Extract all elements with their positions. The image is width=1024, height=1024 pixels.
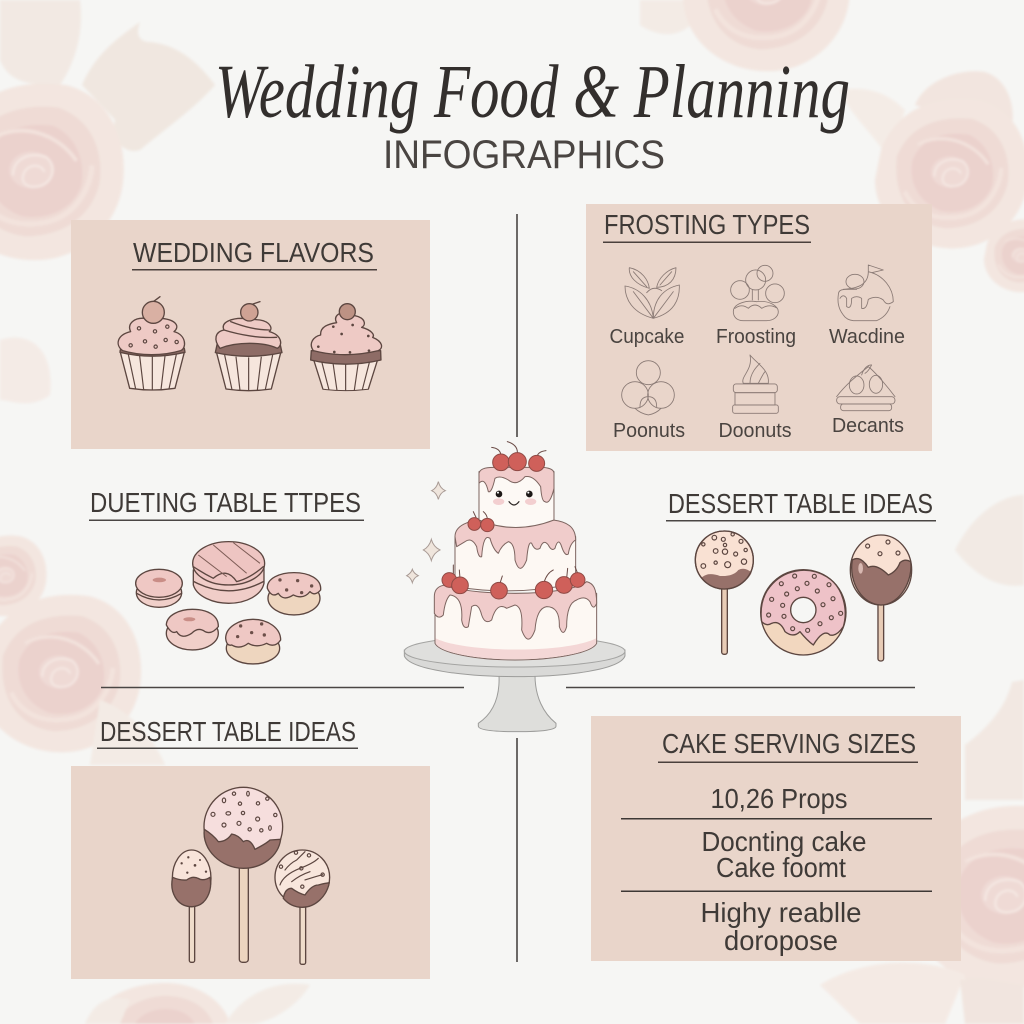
- icons: three cupcakes: [118, 297, 382, 391]
- heading: cake serving sizes: CAKE SERVING SIZES: [662, 728, 916, 759]
- text: serving row three: doropose: [724, 925, 838, 956]
- cherries: [442, 442, 585, 599]
- text: serving row two: Docnting cake: [702, 826, 866, 857]
- icon: three balls: [622, 361, 674, 415]
- icon: donut right: [267, 573, 321, 615]
- icon: cupcake two: [215, 302, 282, 391]
- panel: wedding flavors: [71, 220, 430, 449]
- heading: dessert table ideas right: DESSERT TABLE IDEAS: [668, 488, 933, 519]
- text: serving row three: Highy reablle: [700, 897, 862, 928]
- icon: donut front right: [226, 619, 281, 664]
- illustration: three-tier wedding cake on stand: [404, 442, 625, 732]
- title: [215, 50, 850, 177]
- labels: frosting types: Decants: [832, 415, 904, 437]
- labels: frosting types: Froosting: [716, 326, 796, 348]
- icon: swirled cake pop: [275, 850, 330, 964]
- sparkles: [407, 482, 445, 583]
- icon: small cake pop: [172, 850, 211, 962]
- labels: frosting types: Poonuts: [613, 420, 685, 442]
- icon: donut front left: [166, 609, 218, 650]
- text: serving row two: [702, 826, 866, 883]
- icons: three cake pops: [172, 787, 330, 964]
- title: INFOGRAPHICS: [383, 133, 665, 177]
- icons: frosting types: [622, 265, 895, 415]
- icon: cake with flag: [838, 265, 893, 321]
- middle tier: [455, 520, 576, 591]
- icons: macarons and donuts: [136, 542, 321, 664]
- icon: leaves: [625, 268, 679, 318]
- heading: dueting table types: DUETING TABLE TTPES: [90, 487, 361, 518]
- panel: cake serving sizes: [591, 716, 961, 961]
- labels: frosting types: Wacdine: [829, 326, 905, 348]
- labels: frosting types: [610, 326, 905, 442]
- heading: dessert table ideas left: DESSERT TABLE IDEAS: [100, 716, 356, 747]
- title: Wedding Food & Planning: [215, 50, 850, 134]
- top tier with face: [479, 467, 554, 527]
- icon: layered cake: [733, 355, 778, 413]
- icon: frosting balls: [731, 265, 784, 321]
- icon: large cake pop: [204, 787, 283, 962]
- icon: pastry slice: [837, 365, 895, 411]
- center divider lines: [101, 214, 915, 962]
- panel: cake pops: [71, 766, 430, 979]
- icon: cupcake three: [311, 304, 382, 391]
- icon: sprinkled donut: [761, 570, 846, 655]
- heading: wedding flavors: WEDDING FLAVORS: [133, 237, 374, 268]
- section: dessert table ideas right: [666, 488, 936, 661]
- icons: cake pops and donut: [695, 531, 912, 661]
- icon: cake pop right: [850, 535, 912, 661]
- text: serving row three: [700, 897, 862, 956]
- section: dueting table types: [89, 487, 364, 664]
- labels: frosting types: Cupcake: [610, 326, 684, 348]
- icon: cake pop left: [695, 531, 753, 654]
- icon: cupcake one: [118, 297, 185, 390]
- cake stand: [404, 636, 625, 732]
- heading: frosting types: FROSTING TYPES: [604, 209, 810, 240]
- labels: frosting types: Doonuts: [718, 420, 792, 442]
- text: serving row two: Cake foomt: [716, 852, 846, 883]
- icon: donut left: [136, 569, 182, 607]
- bottom tier: [434, 582, 597, 660]
- icon: large macaron: [193, 542, 265, 603]
- section: dessert table ideas left: [71, 716, 430, 979]
- panel: frosting types: [586, 204, 932, 451]
- text: serving row one: 10,26 Props: [710, 783, 848, 814]
